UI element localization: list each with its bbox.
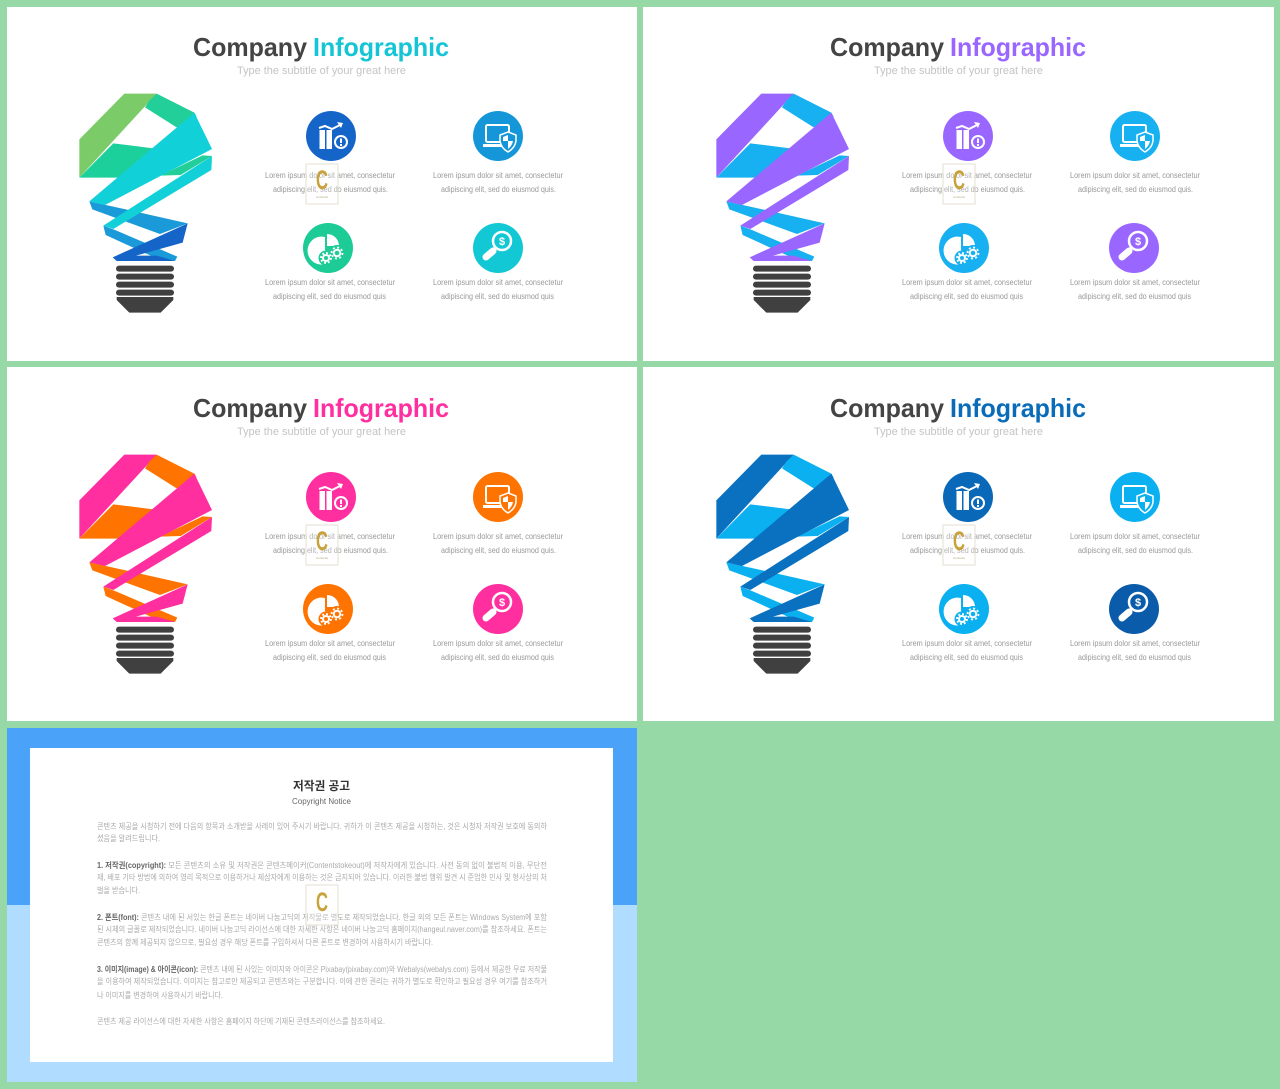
text blocks: adipiscing elit, sed do eiusmod quis [1078, 292, 1191, 301]
watermark: C [953, 526, 965, 556]
icon: magnifier with dollar: $ [499, 597, 505, 609]
text blocks: Lorem ipsum dolor sit amet, consectetur [433, 171, 563, 180]
text blocks: Lorem ipsum dolor sit amet, consectetur [1070, 278, 1200, 287]
icon: pie chart with gears [303, 223, 353, 273]
copyright section 3: 을 이용하여 제작되었습니다. 이미지는 참고로만 제공되고 콘텐츠와는 구분합니다. 이에 관한 권리는 귀하가 별도로 확인하고 필요성 경우 여기를 참조하거 [97, 976, 547, 986]
text blocks: adipiscing elit, sed do eiusmod quis. [441, 546, 556, 555]
text blocks: Lorem ipsum dolor sit amet, consectetur [902, 171, 1032, 180]
text blocks [265, 171, 563, 301]
watermark: C [316, 526, 328, 556]
icon: pie chart with gears [939, 584, 989, 634]
panel: purple infographic [643, 7, 1274, 361]
icon: chart with alert [943, 472, 993, 522]
text blocks: Lorem ipsum dolor sit amet, consectetur [265, 639, 395, 648]
copyright section 1: 벌을 받습니다. [97, 885, 140, 895]
copyright section 2: 콘텐츠의 함께 제공되지 않으므로, 필요성 경우 해당 폰트를 구입하셔서 다른 폰트로 변경하여 사용하시기 바랍니다. [97, 937, 433, 947]
text blocks: adipiscing elit, sed do eiusmod quis [910, 292, 1023, 301]
icon: pie chart with gears [303, 584, 353, 634]
copyright section 2: 2. 폰트(font): 콘텐츠 내에 된 서있는 한글 폰트는 네이버 나눔고딕의 저작물로 별도로 제작되었습니다. 한글 외의 모든 폰트는 Windows System에 포함 [97, 912, 548, 922]
text blocks: adipiscing elit, sed do eiusmod quis [1078, 653, 1191, 662]
title: Company [193, 32, 308, 62]
watermark: Contents [953, 195, 965, 199]
title: Infographic [950, 32, 1086, 62]
title [193, 32, 449, 62]
text blocks: adipiscing elit, sed do eiusmod quis. [910, 185, 1025, 194]
title [193, 393, 449, 423]
watermark: Contents [953, 556, 965, 560]
text blocks: Lorem ipsum dolor sit amet, consectetur [433, 639, 563, 648]
watermark: C [316, 165, 328, 195]
text blocks [902, 171, 1200, 301]
subtitle: Type the subtitle of your great here [874, 426, 1043, 438]
copyright section 1: 재, 배포 기타 방법에 의하여 영리 목적으로 이용하거나 제삼자에게 이용하는 것은 금지되어 있습니다. 이러한 불법 행위 발견 시 준엄한 민사 및 형사상의 처 [97, 872, 547, 882]
text blocks: adipiscing elit, sed do eiusmod quis. [910, 546, 1025, 555]
watermark: Contents [316, 556, 328, 560]
copyright section 3: 3. 이미지(image) & 아이콘(icon): 콘텐츠 내에 된 사있는 이미지와 아이콘은 Pixabay(pixabay.com)와 Webalys(webalys.com) 등에서 제공한 무료 저작물 [97, 964, 547, 974]
copyright intro: 콘텐츠 제공을 시청하기 전에 다음의 항목과 소개받을 사례이 있어 주시기 바랍니다. 귀하가 이 콘텐츠 제공을 시청하는, 것은 시청자 저작권 보호에 동의하 [97, 821, 548, 831]
text blocks [902, 532, 1200, 662]
text blocks: adipiscing elit, sed do eiusmod quis [273, 653, 386, 662]
icon: laptop with shield [473, 111, 523, 161]
text blocks: Lorem ipsum dolor sit amet, consectetur [265, 278, 395, 287]
copyright section 2: 된 시체의 글꼴로 제작되었습니다. 네이버 나눔고딕 라이선스에 대한 자세한 사항은 네이버 나눔고딕 홈페이지(hangeul.naver.com)를 참조하세요. 폰트는 [97, 924, 547, 934]
copyright section 3 [97, 964, 547, 1000]
copyright section 2 [97, 912, 548, 947]
text blocks: Lorem ipsum dolor sit amet, consectetur [433, 532, 563, 541]
icon: magnifier with dollar [473, 584, 523, 634]
copyright section 1: 1. 저작권(copyright): 모든 콘텐츠의 소유 및 저작권은 콘텐츠메이커(Contentstokeout)에 저작자에게 있습니다. 사전 동의 없이 불법적 이용, 무단전 [97, 860, 547, 870]
copyright intro: 셨음을 알려드립니다. [97, 833, 160, 843]
text blocks [265, 532, 563, 662]
icon: magnifier with dollar [473, 223, 523, 273]
copyright intro [97, 821, 548, 843]
text blocks: Lorem ipsum dolor sit amet, consectetur [433, 278, 563, 287]
copyright section 1 [97, 860, 547, 895]
text blocks: adipiscing elit, sed do eiusmod quis [910, 653, 1023, 662]
copyright section 3: 나 이미지를 변경하여 사용하시기 바랍니다. [97, 990, 223, 1000]
text blocks: adipiscing elit, sed do eiusmod quis. [1078, 546, 1193, 555]
text blocks: adipiscing elit, sed do eiusmod quis. [273, 185, 388, 194]
text blocks: Lorem ipsum dolor sit amet, consectetur [1070, 532, 1200, 541]
text blocks: adipiscing elit, sed do eiusmod quis [441, 292, 554, 301]
copyright footer note: 콘텐츠 제공 라이선스에 대한 자세한 사항은 홈페이지 하단에 기재된 콘텐츠라이선스를 참조하세요. [97, 1016, 385, 1026]
icon: laptop with shield [1110, 472, 1160, 522]
text blocks: adipiscing elit, sed do eiusmod quis. [273, 546, 388, 555]
title: Company [830, 393, 945, 423]
text blocks: Lorem ipsum dolor sit amet, consectetur [265, 532, 395, 541]
subtitle: Type the subtitle of your great here [237, 65, 406, 77]
subtitle: Type the subtitle of your great here [237, 426, 406, 438]
text blocks: Lorem ipsum dolor sit amet, consectetur [265, 171, 395, 180]
text blocks: Lorem ipsum dolor sit amet, consectetur [902, 639, 1032, 648]
subtitle: Type the subtitle of your great here [874, 65, 1043, 77]
icon: magnifier with dollar: $ [1135, 236, 1141, 248]
icon: magnifier with dollar [1109, 584, 1159, 634]
watermark [943, 525, 975, 565]
light bulb [79, 94, 212, 313]
copyright heading: 저작권 공고 [293, 778, 350, 793]
text blocks: Lorem ipsum dolor sit amet, consectetur [902, 278, 1032, 287]
title: Infographic [313, 393, 449, 423]
icon: laptop with shield [1110, 111, 1160, 161]
text blocks: adipiscing elit, sed do eiusmod quis [441, 653, 554, 662]
title: Company [193, 393, 308, 423]
watermark [306, 525, 338, 565]
text blocks: Lorem ipsum dolor sit amet, consectetur [902, 532, 1032, 541]
icon: magnifier with dollar: $ [1135, 597, 1141, 609]
light bulb [716, 94, 849, 313]
text blocks: adipiscing elit, sed do eiusmod quis. [1078, 185, 1193, 194]
text blocks: Lorem ipsum dolor sit amet, consectetur [1070, 171, 1200, 180]
watermark [943, 164, 975, 204]
title [830, 393, 1086, 423]
watermark [306, 164, 338, 204]
icon: magnifier with dollar: $ [499, 236, 505, 248]
title: Infographic [313, 32, 449, 62]
panel: teal and green infographic [7, 7, 637, 361]
icon: laptop with shield [473, 472, 523, 522]
text blocks: Lorem ipsum dolor sit amet, consectetur [1070, 639, 1200, 648]
icon: chart with alert [943, 111, 993, 161]
panel: blue infographic [643, 367, 1274, 721]
copyright subtitle: Copyright Notice [292, 796, 351, 806]
watermark: Contents [316, 195, 328, 199]
text blocks: adipiscing elit, sed do eiusmod quis. [441, 185, 556, 194]
title: Infographic [950, 393, 1086, 423]
watermark: C [953, 165, 965, 195]
watermark: C [316, 887, 328, 917]
light bulb [716, 455, 849, 674]
panel: copyright notice [7, 728, 637, 1082]
title [830, 32, 1086, 62]
icon: chart with alert [306, 111, 356, 161]
icon: magnifier with dollar [1109, 223, 1159, 273]
icon: pie chart with gears [939, 223, 989, 273]
light bulb [79, 455, 212, 674]
title: Company [830, 32, 945, 62]
icon: chart with alert [306, 472, 356, 522]
text blocks: adipiscing elit, sed do eiusmod quis [273, 292, 386, 301]
panel: pink and orange infographic [7, 367, 637, 721]
watermark [306, 885, 338, 925]
